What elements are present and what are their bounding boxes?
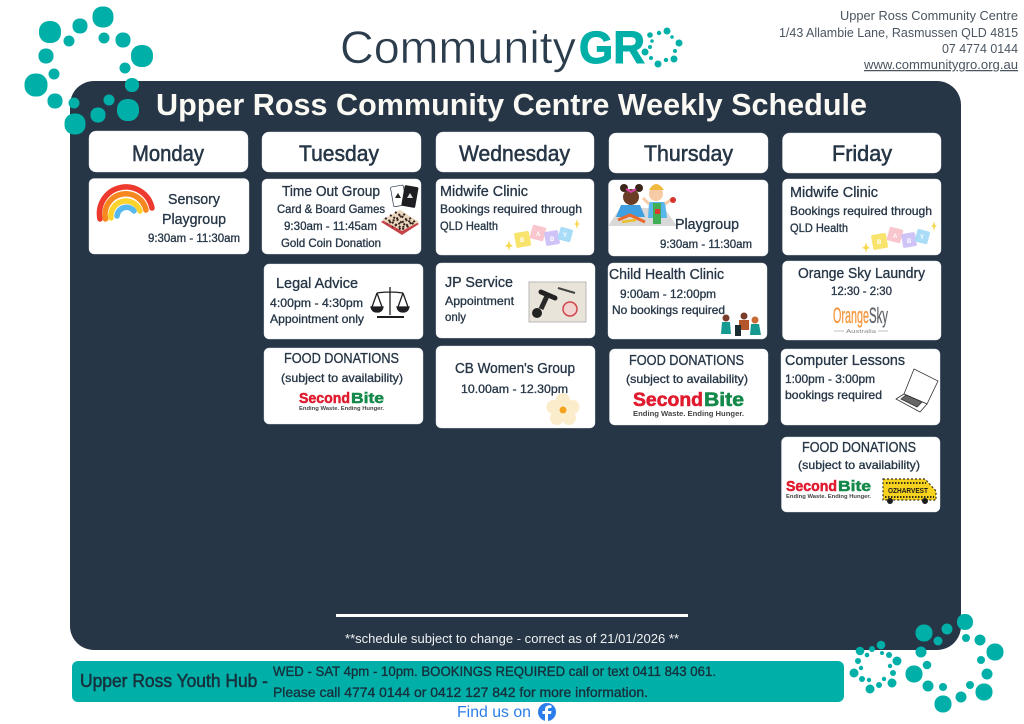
card: CB Women's Group: 10.00am - 12.30pm xyxy=(461,382,568,396)
card: Food Donations: FOOD DONATIONS xyxy=(284,351,399,367)
day heading: Monday xyxy=(89,131,248,172)
card: CB Women's Group xyxy=(436,346,595,428)
footnote: **schedule subject to change - correct as of 21/01/2026 ** xyxy=(345,632,679,646)
find us on Facebook: Find us on xyxy=(457,704,531,721)
logo: SecondBite: Bite xyxy=(351,390,384,407)
icon: flower xyxy=(546,393,580,425)
card: Child Health Clinic xyxy=(608,263,767,339)
card: Sensory Playgroup: Sensory xyxy=(168,192,221,208)
icon: Facebook xyxy=(538,703,556,721)
card: Legal Advice xyxy=(264,264,423,339)
icon: chess board xyxy=(381,210,419,235)
icon: baby blocks: B xyxy=(550,237,555,243)
card: Sensory Playgroup: Playgroup xyxy=(162,212,226,228)
contact details: www.communitygro.org.au xyxy=(863,58,1018,72)
contact details: 1/43 Allambie Lane, Rasmussen QLD 4815 xyxy=(779,26,1018,40)
contact details xyxy=(779,9,1018,72)
card: Sensory Playgroup xyxy=(89,178,249,254)
icon: baby blocks xyxy=(505,219,580,251)
logo: SecondBite xyxy=(786,478,871,500)
card: Time Out Group: Time Out Group xyxy=(282,184,380,200)
card: Midwife Clinic: QLD Health xyxy=(440,219,498,233)
main schedule panel xyxy=(70,81,961,650)
card: Time Out Group: Card & Board Games xyxy=(277,202,385,216)
card: Food Donations: FOOD DONATIONS xyxy=(629,353,744,369)
day heading: Friday: Friday xyxy=(832,141,893,166)
card: Legal Advice: Legal Advice xyxy=(276,276,358,292)
logo: SecondBite: Ending Waste. Ending Hunger. xyxy=(299,406,384,412)
day heading: Wednesday: Wednesday xyxy=(459,141,571,166)
logo: Orange Sky: Orange xyxy=(833,303,869,328)
icon: rubber stamp photo xyxy=(529,282,586,322)
card: Time Out Group: 9:30am - 11:45am xyxy=(284,219,377,233)
logo: Orange Sky xyxy=(833,303,888,335)
card: JP Service: only xyxy=(445,310,466,324)
column: Thursday xyxy=(608,133,768,425)
column: Wednesday xyxy=(436,132,595,428)
card: Midwife Clinic xyxy=(782,179,941,255)
card: Legal Advice: 4:00pm - 4:30pm xyxy=(270,296,363,310)
card: Computer Lessons xyxy=(781,349,940,425)
card: Legal Advice: Appointment only xyxy=(270,312,364,326)
icon: baby blocks: Y xyxy=(920,235,924,241)
icon: children playing xyxy=(608,184,677,226)
banner: Upper Ross Youth Hub: WED - SAT 4pm - 10pm. BOOKINGS REQUIRED call or text 0411 843 061. xyxy=(273,663,716,679)
contact details: 07 4774 0144 xyxy=(942,42,1018,56)
card: JP Service: Appointment xyxy=(445,294,515,308)
title: Upper Ross Community Centre Weekly Schedule xyxy=(156,87,867,122)
logo: OzHarvest bus: OZHARVEST xyxy=(888,488,929,495)
card: Food Donations xyxy=(264,348,423,424)
card: Sensory Playgroup: 9:30am - 11:30am xyxy=(148,231,240,245)
day heading: Tuesday xyxy=(262,132,421,172)
card: JP Service: JP Service xyxy=(445,275,513,291)
day heading: Monday: Monday xyxy=(132,141,205,166)
icon: laptop xyxy=(896,369,938,412)
logo: SecondBite: Bite xyxy=(704,389,744,411)
card: Midwife Clinic: Bookings required through xyxy=(790,204,932,218)
card: Computer Lessons: 1:00pm - 3:00pm xyxy=(785,372,875,386)
column: Monday xyxy=(89,131,249,254)
icon: baby blocks: A xyxy=(536,232,541,238)
card: Food Donations: (subject to availability) xyxy=(281,371,403,385)
card: CB Women's Group: CB Women's Group xyxy=(455,361,575,377)
card: Food Donations: FOOD DONATIONS xyxy=(802,440,916,456)
card: Midwife Clinic: QLD Health xyxy=(790,221,848,235)
day heading: Friday xyxy=(782,133,941,173)
column: Friday xyxy=(781,133,941,512)
icon: baby blocks: Y xyxy=(563,233,567,239)
logo: CommunityGRO: GR xyxy=(579,22,645,73)
logo: Orange Sky: Australia xyxy=(846,329,876,335)
logo: SecondBite: Ending Waste. Ending Hunger. xyxy=(633,409,744,418)
logo: SecondBite xyxy=(633,389,744,418)
card: Food Donations: (subject to availability) xyxy=(626,372,748,386)
banner: Upper Ross Youth Hub: Upper Ross Youth Hub - xyxy=(80,671,268,691)
contact details: Upper Ross Community Centre xyxy=(840,9,1018,23)
card: Food Donations: (subject to availability) xyxy=(798,458,920,472)
logo: SecondBite xyxy=(299,390,384,412)
logo: Orange Sky: Sky xyxy=(869,303,888,328)
card: JP Service xyxy=(436,263,595,338)
icon: baby blocks: B xyxy=(520,238,525,244)
logo: CommunityGRO xyxy=(340,22,682,73)
card: Food Donations xyxy=(782,437,940,512)
logo: CommunityGRO: Community xyxy=(340,22,577,73)
card: Child Health Clinic: Child Health Clinic xyxy=(609,267,724,283)
decoration: teal dots top left xyxy=(24,6,153,134)
logo: SecondBite: Second xyxy=(299,390,350,407)
card: Child Health Clinic: 9:00am - 12:00pm xyxy=(620,287,716,301)
card: Food Donations xyxy=(610,349,768,425)
card: Orange Sky Laundry xyxy=(782,261,941,340)
card: Midwife Clinic: Midwife Clinic xyxy=(790,185,878,201)
card: Midwife Clinic: Midwife Clinic xyxy=(440,184,528,200)
card: Computer Lessons: bookings required xyxy=(785,388,882,402)
divider line xyxy=(336,614,688,617)
logo: SecondBite: Bite xyxy=(838,478,871,495)
icon: baby blocks xyxy=(862,221,937,253)
icon: rainbow xyxy=(99,187,152,219)
icon: baby blocks: B xyxy=(907,239,912,245)
card: Computer Lessons: Computer Lessons xyxy=(785,353,905,369)
card: Time Out Group: Gold Coin Donation xyxy=(281,236,381,250)
logo: SecondBite: Second xyxy=(786,478,837,495)
logo: SecondBite: Second xyxy=(633,389,703,411)
card: Child Health Clinic: No bookings required xyxy=(612,303,725,317)
icon: baby blocks: A xyxy=(893,234,898,240)
decoration: teal dots bottom right xyxy=(850,614,1004,712)
icon: baby blocks: B xyxy=(877,240,882,246)
icon: three children xyxy=(721,312,761,336)
card: Midwife Clinic xyxy=(436,179,594,255)
card: Time Out Group xyxy=(262,179,421,254)
card: Playgroup: Playgroup xyxy=(675,217,739,233)
card: Playgroup xyxy=(608,180,768,256)
banner: Upper Ross Youth Hub: Please call 4774 0144 or 0412 127 842 for more information. xyxy=(273,684,648,700)
find us on Facebook xyxy=(457,703,556,721)
card: Orange Sky Laundry: 12:30 - 2:30 xyxy=(831,284,892,298)
icon: playing cards xyxy=(390,185,419,208)
day heading: Thursday xyxy=(609,133,768,173)
day heading: Tuesday: Tuesday xyxy=(299,141,380,166)
logo: SecondBite: Ending Waste. Ending Hunger. xyxy=(786,494,871,500)
card: Orange Sky Laundry: Orange Sky Laundry xyxy=(798,266,926,282)
logo: OzHarvest bus xyxy=(883,479,936,504)
card: Midwife Clinic: Bookings required through xyxy=(440,202,582,216)
column: Tuesday xyxy=(262,132,423,424)
day heading: Thursday: Thursday xyxy=(644,141,734,166)
day heading: Wednesday xyxy=(436,132,594,172)
icon: scales of justice xyxy=(371,287,409,317)
banner: Upper Ross Youth Hub xyxy=(72,661,844,702)
card: Playgroup: 9:30am - 11:30am xyxy=(660,237,752,251)
